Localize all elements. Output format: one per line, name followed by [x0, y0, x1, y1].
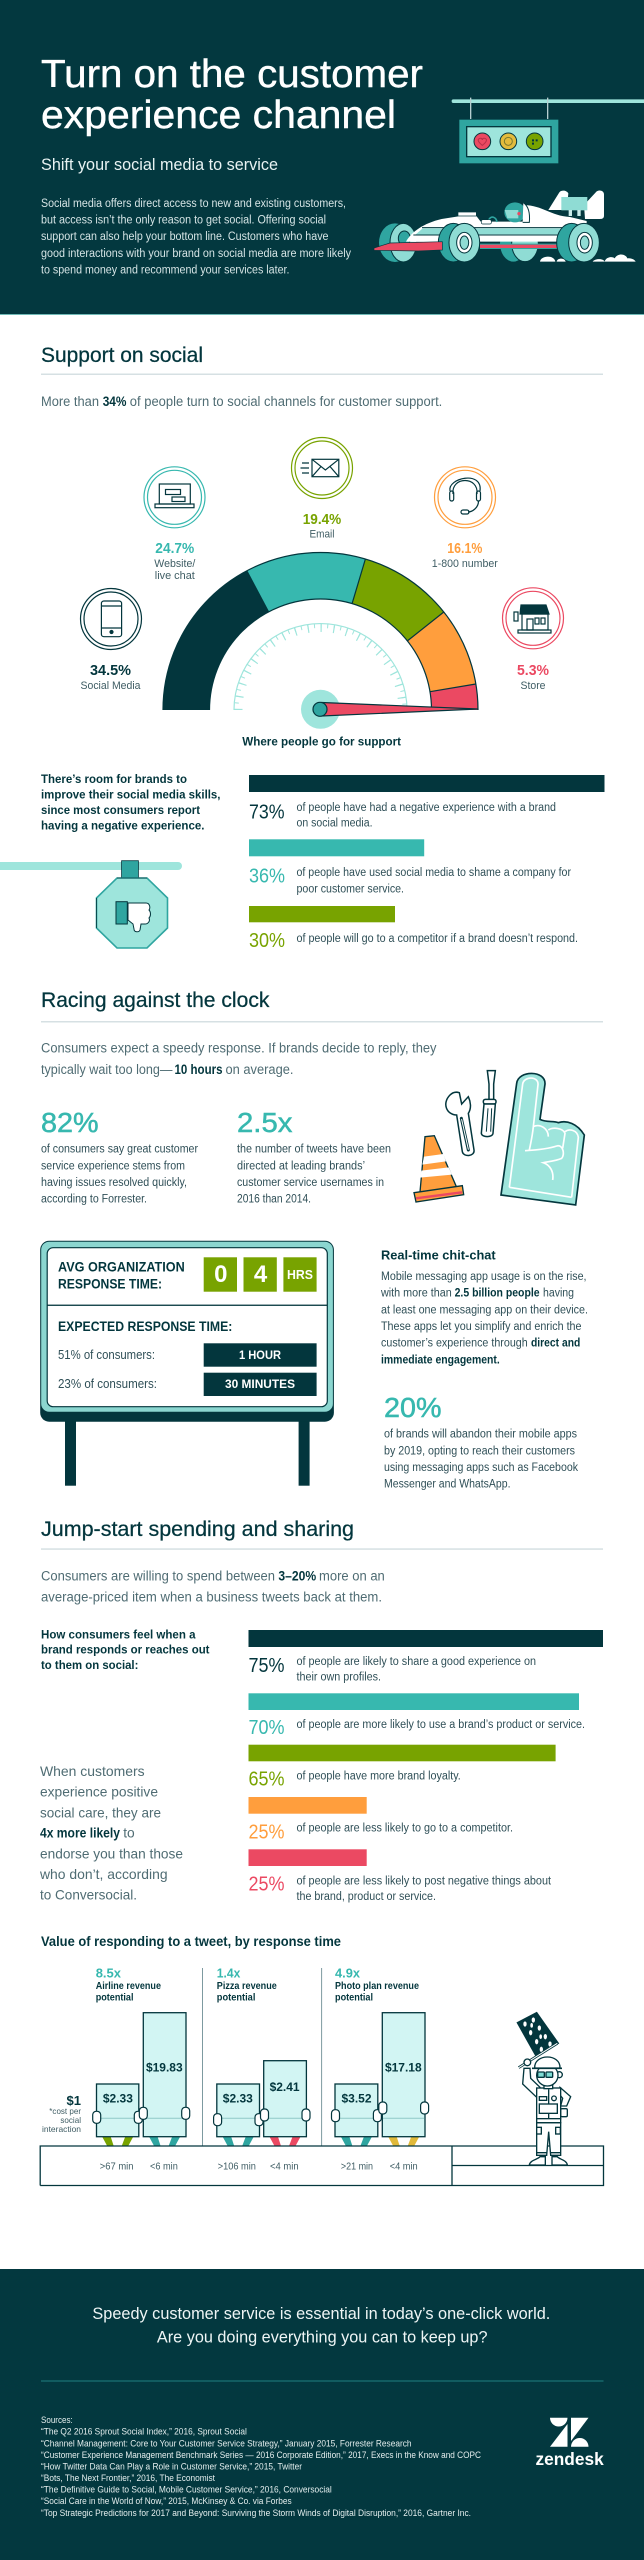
stat: 2.5x — [237, 1107, 391, 1206]
callout: 4x more likely: 4x more likely — [40, 1825, 120, 1841]
bar character: airline over 67 min — [93, 2084, 142, 2146]
stat: 2.5x: 2016 than 2014. — [237, 1194, 311, 1206]
intro paragraph: good interactions with your brand on social media are more likely — [41, 248, 351, 260]
channel: 1-800 number: 16.1% — [447, 541, 482, 557]
illustration: pit board and race car — [374, 98, 644, 262]
response time labels: <4 min — [390, 2161, 418, 2172]
cost note: interaction — [42, 2124, 81, 2134]
expected response time: 23% of consumers: — [58, 1377, 157, 1391]
text block: Real-time chit-chat — [380, 1247, 588, 1366]
sources: “Social Care in the World of Now,” 2015, McKinsey & Co. via Forbes — [41, 2496, 292, 2506]
icon: laptop — [144, 467, 205, 528]
stat: 20%: using messaging apps such as Facebook — [384, 1462, 578, 1474]
bar chart: how consumers feel — [248, 1630, 603, 1903]
stat: 25% competitor: of people are less likely to go to a competitor. — [296, 1823, 513, 1835]
airline heading: potential — [96, 1992, 134, 2003]
stat: 25% competitor: 25% — [248, 1821, 285, 1843]
gauge chart: where people go for support — [163, 552, 478, 749]
gauge segments — [163, 552, 478, 710]
expected response time: 51% of consumers: — [58, 1348, 155, 1362]
photo plan heading: Photo plan revenue — [335, 1981, 419, 1992]
pizza heading: 1.4x — [217, 1965, 241, 1980]
icon: traffic cone — [414, 1136, 464, 1202]
bar chart: negative experience stats — [249, 775, 604, 952]
bar chart heading: How consumers feel when a — [41, 1627, 196, 1641]
stat: 20% — [384, 1392, 578, 1491]
stat: 82%: 82% — [41, 1107, 99, 1138]
footer panel — [0, 2269, 644, 2560]
jump-start intro text — [41, 1569, 385, 1604]
photo plan heading: potential — [335, 1992, 373, 2003]
stat: 70%: of people are more likely to use a brand’s product or service. — [296, 1719, 585, 1731]
stat: 36% — [249, 839, 571, 896]
stat: 75%: their own profiles. — [296, 1671, 381, 1683]
callout: 4x more likely: social care, they are — [40, 1804, 161, 1820]
bar character: pizza under 4 min: $2.41 — [270, 2080, 300, 2094]
stat: 70% — [248, 1693, 585, 1739]
expected response time: EXPECTED RESPONSE TIME: — [58, 1319, 232, 1334]
callout: 4x more likely: to Conversocial. — [40, 1886, 137, 1902]
gauge caption: Where people go for support — [242, 735, 401, 749]
text block: Real-time chit-chat: These apps let you simplify and enrich the — [381, 1321, 582, 1333]
intro paragraph: support can also help your bottom line. Customers who have — [41, 231, 328, 243]
response time labels: >67 min — [100, 2161, 134, 2172]
text block: Real-time chit-chat: 2.5 billion people — [455, 1288, 540, 1300]
stat: 20%: Messenger and WhatsApp. — [384, 1479, 510, 1491]
stat: 2.5x: the number of tweets have been — [237, 1144, 391, 1156]
bar character: pizza over 106 min: $2.33 — [223, 2092, 253, 2106]
average response time: HRS — [287, 1267, 313, 1282]
channel: store: Store — [520, 680, 546, 692]
channel: email — [292, 438, 352, 541]
racing intro text — [41, 1041, 437, 1077]
bar character: photo plan over 21 min — [332, 2084, 381, 2146]
stat: 2.5x: 2.5x — [237, 1107, 292, 1138]
section heading: Support on social: Support on social — [41, 344, 203, 367]
header panel — [0, 0, 644, 315]
sources — [41, 2415, 482, 2518]
stat: 75%: of people are likely to share a good experience on — [296, 1656, 536, 1668]
chart: revenue potential by response time — [40, 1965, 603, 2186]
average response time: 4 — [254, 1261, 268, 1288]
icon: headset — [434, 467, 496, 528]
jump-start intro text: 3–20% — [278, 1569, 316, 1584]
stat: 25% negative — [248, 1849, 552, 1903]
callout: 4x more likely: endorse you than those — [40, 1845, 183, 1861]
average response time: RESPONSE TIME: — [58, 1276, 162, 1291]
sources: “The Q2 2016 Sprout Social Index,” 2016, Sprout Social — [41, 2427, 247, 2437]
stat: 73% — [249, 775, 604, 830]
bar chart heading: brand responds or reaches out — [41, 1643, 210, 1657]
sources: Sources: — [41, 2415, 73, 2425]
title: Turn on the customer — [41, 53, 423, 96]
illustration: cone, wrench, screwdriver, foam finger — [414, 1071, 584, 1205]
stat: 75%: 75% — [248, 1655, 285, 1677]
text block: Real-time chit-chat: immediate engagement. — [381, 1354, 500, 1366]
stat: 82%: of consumers say great customer — [41, 1144, 198, 1156]
pizza heading: potential — [217, 1992, 256, 2003]
gauge needle — [301, 690, 478, 729]
billboard legs — [65, 1415, 310, 1486]
title: experience channel — [41, 94, 396, 137]
sources: “Customer Experience Management Benchmark Series — 2016 Corporate Edition,” 2017, Execs in the Know and COPC — [41, 2450, 482, 2460]
response time labels: >106 min — [218, 2161, 256, 2172]
stat: 25% negative: 25% — [248, 1874, 285, 1896]
average response time — [58, 1257, 317, 1292]
stat: 2.5x: directed at leading brands’ — [237, 1160, 365, 1172]
stat: 25% negative: the brand, product or service. — [296, 1891, 436, 1903]
bar character: photo plan under 4 min — [379, 2013, 429, 2146]
support intro text: 34% — [103, 394, 126, 409]
negative experience statement: There’s room for brands to — [41, 772, 187, 786]
text block: Real-time chit-chat: direct and — [531, 1338, 580, 1350]
stat: 20%: 20% — [384, 1392, 442, 1423]
stat: 25% negative: of people are less likely to post negative things about — [296, 1876, 552, 1888]
expected response time: 30 MINUTES — [225, 1377, 295, 1391]
logo: zendesk — [536, 2418, 604, 2469]
channel: social media: Social Media — [80, 680, 141, 692]
bar chart heading: to them on social: — [41, 1658, 138, 1672]
callout: 4x more likely — [39, 1763, 183, 1902]
airline heading: Airline revenue — [96, 1981, 161, 1992]
text block: Real-time chit-chat: Mobile messaging app usage is on the rise, — [381, 1271, 586, 1283]
expected response time — [58, 1319, 317, 1396]
racing intro text: 10 hours — [174, 1062, 222, 1077]
bar character: airline over 67 min: $2.33 — [103, 2092, 133, 2106]
channel: store: 5.3% — [517, 663, 549, 679]
stat: 75% — [248, 1630, 603, 1683]
stat: 36%: of people have used social media to shame a company for — [296, 867, 571, 879]
intro paragraph — [41, 198, 351, 276]
stat: 20%: of brands will abandon their mobile apps — [384, 1429, 577, 1441]
stat: 82%: according to Forrester. — [41, 1194, 147, 1206]
cost note — [42, 2093, 81, 2134]
channel: website / live chat — [144, 467, 205, 582]
gauge ticks — [234, 624, 407, 710]
support intro text: More than — [41, 394, 99, 409]
sources: “Channel Management: Core to Your Customer Service Strategy,” January 2015, Forrester Research — [41, 2438, 412, 2448]
photo plan heading: 4.9x — [335, 1965, 361, 1980]
negative experience statement: since most consumers report — [41, 803, 200, 817]
callout: 4x more likely: who don’t, according — [39, 1866, 168, 1882]
response time labels: <6 min — [150, 2161, 178, 2172]
stat: 30%: 30% — [249, 930, 285, 952]
callout: 4x more likely: When customers — [40, 1763, 145, 1779]
logo: zendesk: zendesk — [536, 2449, 604, 2469]
intro paragraph: Social media offers direct access to new and existing customers, — [41, 198, 346, 210]
billboard frame — [40, 1241, 334, 1422]
bar character: airline under 6 min: $19.83 — [146, 2061, 183, 2075]
stat: 30% — [249, 906, 578, 952]
cost note: $1 — [67, 2093, 81, 2108]
stat: 25% competitor — [248, 1797, 513, 1843]
stat: 82%: service experience stems from — [41, 1160, 185, 1172]
icon: screwdriver — [481, 1071, 496, 1137]
bar chart heading — [41, 1627, 210, 1672]
icon: wrench — [446, 1092, 474, 1155]
racing intro text: on average. — [226, 1062, 294, 1077]
icon: foam finger — [501, 1073, 584, 1205]
text block: Real-time chit-chat: having — [543, 1288, 574, 1300]
title — [41, 53, 423, 137]
expected response time: 1 HOUR — [239, 1348, 281, 1362]
airline heading — [96, 1965, 161, 2003]
channel: social media — [80, 588, 142, 692]
stat: 36%: 36% — [249, 866, 285, 888]
bar character: photo plan over 21 min: $3.52 — [341, 2092, 372, 2106]
text block: Real-time chit-chat: with more than — [380, 1288, 452, 1300]
closing message — [92, 2305, 550, 2346]
icon: hanging thumbs-down sign — [0, 861, 182, 948]
heading: value of responding to a tweet: Value of responding to a tweet, by response time — [41, 1933, 341, 1949]
jump-start intro text: Consumers are willing to spend between — [41, 1569, 275, 1584]
cost note: *cost per — [49, 2106, 81, 2116]
marshal figure — [523, 2057, 571, 2165]
stat: 30%: of people will go to a competitor if a brand doesn’t respond. — [296, 933, 578, 945]
jump-start intro text: more on an — [319, 1569, 385, 1584]
stat: 65% — [248, 1745, 556, 1791]
stat: 73%: 73% — [249, 802, 285, 824]
response time labels: >21 min — [341, 2161, 373, 2172]
icon: envelope — [292, 438, 352, 498]
chart dividers — [202, 1968, 322, 2146]
subtitle: Shift your social media to service — [41, 155, 278, 174]
cost note: social — [60, 2115, 81, 2125]
stat: 82% — [41, 1107, 198, 1206]
checkered flag — [517, 2013, 558, 2068]
negative experience statement: having a negative experience. — [41, 818, 204, 832]
icon: smartphone — [80, 588, 142, 650]
channel: 1-800 number: 1-800 number — [432, 558, 498, 570]
channel: website / live chat: Website/ — [154, 558, 196, 570]
stat: 20%: by 2019, opting to reach their customers — [384, 1445, 575, 1457]
response time labels — [100, 2161, 418, 2172]
sources: “The Definitive Guide to Social, Mobile Customer Service,” 2016, Conversocial — [41, 2484, 332, 2494]
closing message: Speedy customer service is essential in today’s one-click world. — [92, 2305, 550, 2323]
negative experience statement — [41, 772, 220, 832]
callout: 4x more likely: experience positive — [40, 1784, 158, 1800]
callout: 4x more likely: to — [123, 1825, 135, 1841]
airline heading: 8.5x — [96, 1965, 122, 1980]
average response time: AVG ORGANIZATION — [58, 1260, 185, 1275]
jump-start intro text: average-priced item when a business tweets back at them. — [41, 1589, 382, 1604]
negative experience statement: improve their social media skills, — [41, 788, 220, 802]
support intro text: of people turn to social channels for customer support. — [130, 394, 442, 409]
intro paragraph: but access isn’t the only reason to get social. Offering social — [41, 214, 326, 226]
stat: 36%: poor customer service. — [296, 884, 404, 896]
sources: “How Twitter Data Can Play a Role in Customer Service,” 2015, Twitter — [41, 2461, 302, 2471]
photo plan heading — [335, 1965, 419, 2003]
pizza heading: Pizza revenue — [217, 1981, 277, 1992]
bar character: pizza under 4 min — [260, 2061, 310, 2146]
icon: storefront — [502, 588, 564, 649]
intro paragraph: to spend money and recommend your services later. — [41, 264, 290, 276]
bar character: airline under 6 min — [139, 2013, 190, 2146]
text block: Real-time chit-chat: at least one messaging app on their device. — [381, 1304, 588, 1316]
sources: “Top Strategic Predictions for 2017 and Beyond: Surviving the Storm Winds of Digital Disruption,” 2016, Gartner Inc. — [41, 2508, 471, 2518]
stat: 65%: 65% — [248, 1769, 285, 1791]
stat: 73%: of people have had a negative experience with a brand — [296, 802, 556, 814]
channel: 1-800 number — [432, 467, 498, 570]
pizza heading — [217, 1965, 277, 2003]
billboard: response times — [40, 1241, 334, 1486]
text block: Real-time chit-chat: Real-time chit-chat — [381, 1247, 496, 1262]
average response time: 0 — [214, 1261, 227, 1288]
channel: store — [502, 588, 564, 692]
stat: 73%: on social media. — [296, 818, 372, 830]
channel: email: Email — [310, 529, 334, 541]
bar character: pizza over 106 min — [214, 2084, 263, 2146]
text block: Real-time chit-chat: customer’s experience through — [381, 1338, 528, 1350]
stat: 82%: having issues resolved quickly, — [41, 1177, 187, 1189]
sources: “Bots, The Next Frontier,” 2016, The Economist — [41, 2473, 216, 2483]
racing intro text: Consumers expect a speedy response. If brands decide to reply, they — [41, 1041, 437, 1056]
channel: email: 19.4% — [303, 512, 341, 528]
racing intro text: typically wait too long— — [41, 1062, 173, 1077]
section heading: Racing against the clock: Racing against the clock — [41, 989, 270, 1012]
closing message: Are you doing everything you can to keep up? — [157, 2328, 488, 2346]
channel: website / live chat: live chat — [155, 570, 195, 582]
stat: 2.5x: customer service usernames in — [237, 1177, 384, 1189]
illustration: flag marshal — [517, 2013, 571, 2165]
bar character: photo plan under 4 min: $17.18 — [385, 2061, 422, 2075]
stat: 70%: 70% — [248, 1717, 285, 1739]
track platform — [40, 2146, 603, 2186]
response time labels: <4 min — [270, 2161, 299, 2172]
section heading: Jump-start spending and sharing: Jump-start spending and sharing — [41, 1518, 354, 1541]
stat: 65%: of people have more brand loyalty. — [296, 1770, 461, 1782]
channel: website / live chat: 24.7% — [155, 541, 194, 557]
channel: social media: 34.5% — [90, 663, 131, 679]
